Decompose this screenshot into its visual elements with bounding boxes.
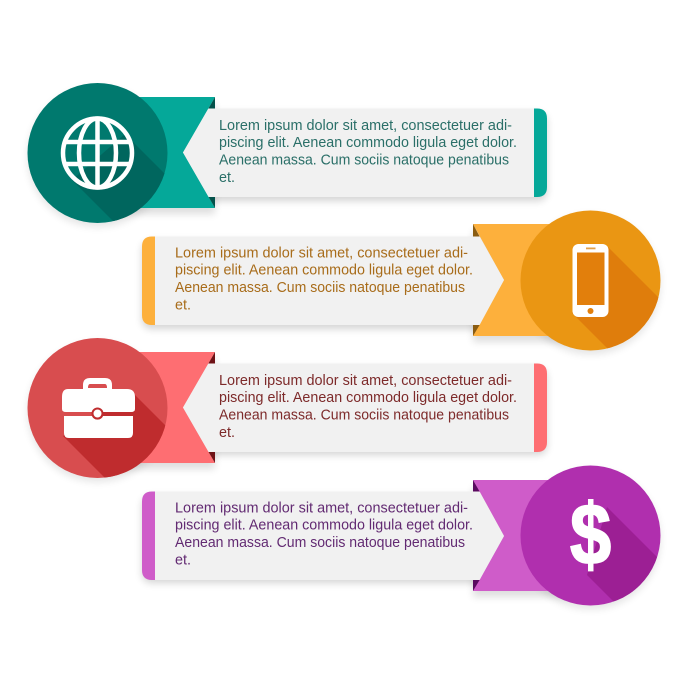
long shadow xyxy=(572,247,658,348)
panel: row 4 dollar xyxy=(142,466,668,618)
text block: et. xyxy=(219,425,235,441)
circle badge xyxy=(28,83,168,223)
ribbon xyxy=(473,224,560,336)
text block: Lorem ipsum dolor sit amet, consectetuer adi- xyxy=(175,500,468,516)
ribbon fold top xyxy=(473,480,480,492)
text block: piscing elit. Aenean commodo ligula eget dolor. xyxy=(219,135,517,151)
icon: smartphone xyxy=(572,244,608,317)
card accent xyxy=(534,108,547,197)
text block: Lorem ipsum dolor sit amet, consectetuer adi- xyxy=(175,246,468,262)
text block: et. xyxy=(175,298,191,314)
panel: row 3 briefcase xyxy=(28,338,547,496)
icon: briefcase xyxy=(62,378,135,438)
text card xyxy=(155,492,504,580)
ribbon fold bottom xyxy=(473,325,480,336)
text block: piscing elit. Aenean commodo ligula eget dolor. xyxy=(175,518,473,534)
ribbon fold bottom xyxy=(209,452,215,463)
ribbon xyxy=(130,352,215,463)
icon: globe xyxy=(63,118,132,188)
text block: Aenean massa. Cum sociis natoque penatibus xyxy=(175,280,465,296)
ribbon fold top xyxy=(208,97,215,108)
ribbon fold bottom xyxy=(473,580,480,591)
panel: row 2 phone xyxy=(142,210,668,366)
text block: Aenean massa. Cum sociis natoque penatibus xyxy=(175,535,465,551)
long shadow xyxy=(72,135,164,222)
long shadow xyxy=(587,507,657,602)
ribbon fold top xyxy=(473,224,480,236)
text card xyxy=(155,236,504,325)
circle badge xyxy=(520,466,660,606)
ribbon fold bottom xyxy=(209,197,215,208)
text card xyxy=(183,108,534,197)
card accent xyxy=(534,364,547,452)
text block: piscing elit. Aenean commodo ligula eget dolor. xyxy=(175,262,473,278)
ribbon fold top xyxy=(208,352,215,364)
icon: dollar sign: $ xyxy=(570,486,611,582)
text card xyxy=(183,364,534,452)
ribbon xyxy=(130,97,215,208)
ribbon xyxy=(473,480,560,591)
circle badge xyxy=(28,338,168,478)
long shadow xyxy=(63,395,166,478)
text block: Aenean massa. Cum sociis natoque penatibus xyxy=(219,408,509,424)
text block: et. xyxy=(175,552,191,568)
card accent xyxy=(142,492,155,580)
text block: piscing elit. Aenean commodo ligula eget dolor. xyxy=(219,390,517,406)
card accent xyxy=(142,236,155,325)
circle badge xyxy=(520,210,660,350)
text block: Lorem ipsum dolor sit amet, consectetuer adi- xyxy=(219,373,512,389)
text block: Lorem ipsum dolor sit amet, consectetuer adi- xyxy=(219,118,512,134)
text block: et. xyxy=(219,170,235,186)
text block: Aenean massa. Cum sociis natoque penatibus xyxy=(219,152,509,168)
panel: row 1 globe xyxy=(28,83,547,232)
